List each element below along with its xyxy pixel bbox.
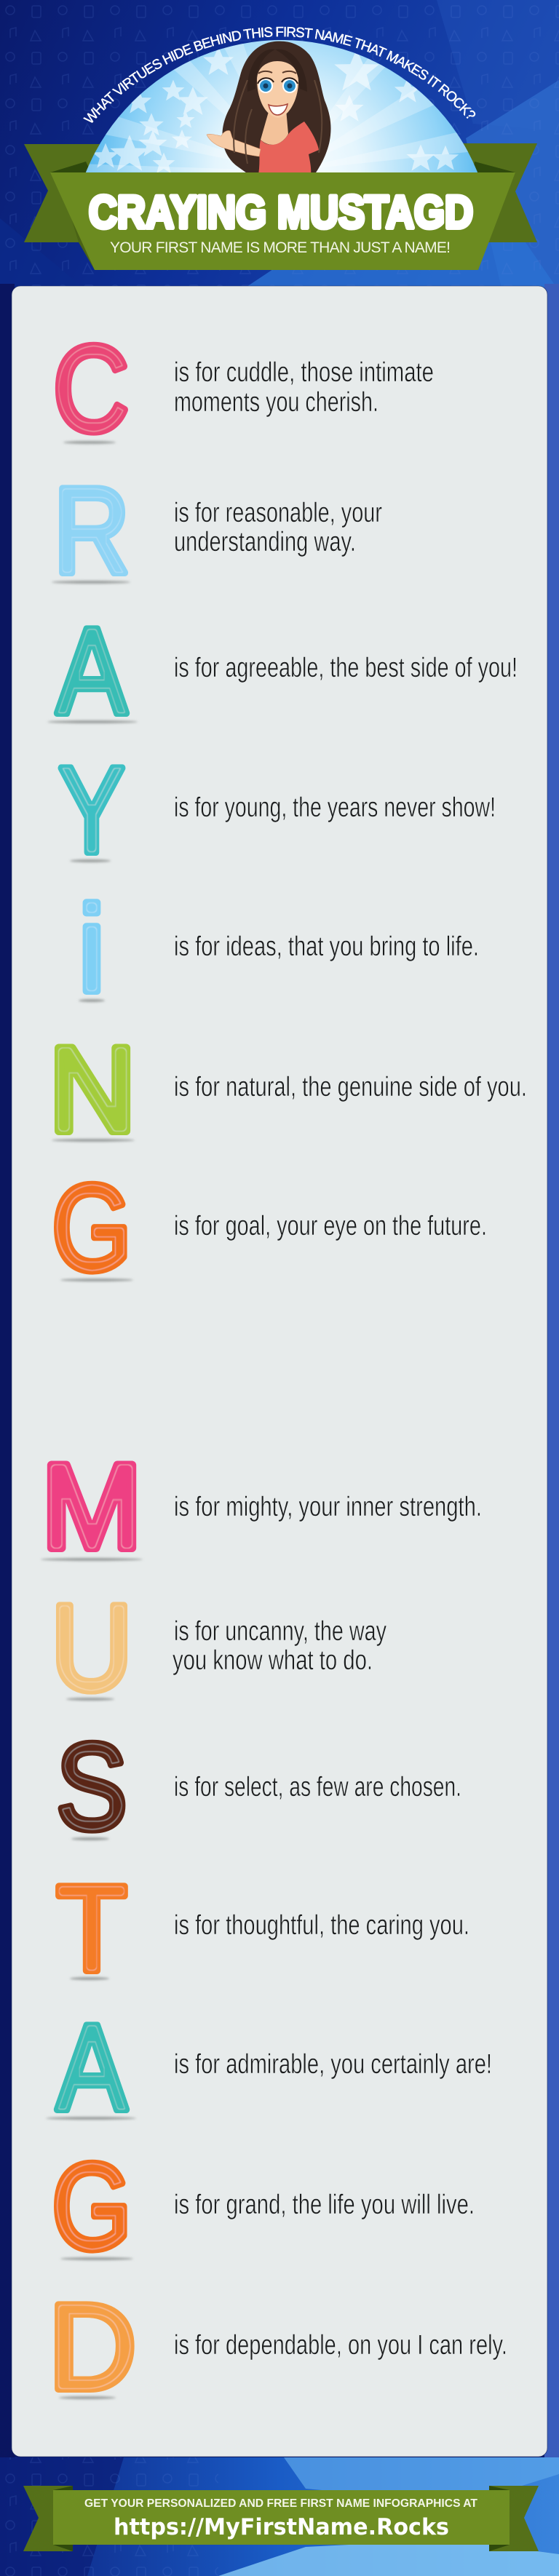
row: G: is for grand, the life you will live. bbox=[174, 2190, 475, 2220]
row: S: S bbox=[56, 1718, 127, 1855]
row: S bbox=[56, 1718, 461, 1855]
neck and chest bbox=[261, 113, 288, 145]
hair highlights bbox=[234, 80, 322, 164]
row: U bbox=[51, 1580, 386, 1716]
row: D bbox=[48, 2278, 507, 2415]
row: I: i bbox=[78, 880, 106, 1017]
footer url: https://MyFirstName.Rocks bbox=[114, 2514, 449, 2540]
header background bbox=[0, 0, 559, 291]
row: T bbox=[56, 1860, 469, 1997]
row: C bbox=[53, 321, 434, 457]
footer ribbon bbox=[23, 2486, 539, 2551]
title: CRAYING MUSTAGD bbox=[89, 187, 473, 238]
shirt bbox=[258, 122, 319, 175]
eyes bbox=[258, 79, 273, 93]
arched tagline: WHAT VIRTUES HIDE BEHIND THIS FIRST NAME THAT MAKES IT ROCK? bbox=[83, 26, 476, 123]
row: U: you know what to do. bbox=[173, 1645, 373, 1676]
sunburst circle with stars bbox=[86, 40, 477, 172]
row: G: G bbox=[52, 1159, 132, 1296]
row: Y bbox=[59, 742, 496, 878]
row: R: is for reasonable, your bbox=[174, 498, 382, 528]
row: G: G bbox=[52, 2138, 132, 2275]
fringe bbox=[247, 49, 307, 92]
row: G bbox=[52, 1159, 487, 1296]
row: R: understanding way. bbox=[174, 527, 356, 557]
row: A: A bbox=[57, 2000, 127, 2136]
row: Y: Y bbox=[59, 742, 124, 878]
row: A bbox=[46, 2000, 492, 2136]
hair back bbox=[222, 41, 331, 175]
footer call to action: GET YOUR PERSONALIZED AND FREE FIRST NAME INFOGRAPHICS AT bbox=[84, 2497, 477, 2510]
row: T: T bbox=[56, 1860, 127, 1997]
header ribbon back bbox=[24, 143, 537, 270]
row: C: C bbox=[53, 321, 129, 457]
row: G bbox=[52, 2138, 475, 2275]
header ribbon front bbox=[50, 172, 515, 270]
face bbox=[257, 61, 298, 118]
row: D: D bbox=[48, 2278, 137, 2415]
row: S: is for select, as few are chosen. bbox=[174, 1772, 461, 1802]
row: C: is for cuddle, those intimate bbox=[174, 357, 434, 388]
illustration: woman bbox=[207, 41, 331, 175]
row: R: R bbox=[54, 463, 130, 599]
row: R bbox=[52, 463, 382, 599]
row: M bbox=[41, 1439, 482, 1573]
row: N bbox=[49, 1022, 527, 1156]
footer background bbox=[0, 2457, 559, 2576]
arm and hand bbox=[207, 130, 261, 156]
mouth bbox=[269, 104, 288, 115]
row: N: N bbox=[49, 1022, 136, 1156]
row: I bbox=[78, 880, 479, 1017]
row: C: moments you cherish. bbox=[174, 387, 378, 418]
subtitle: YOUR FIRST NAME IS MORE THAN JUST A NAME! bbox=[110, 239, 451, 256]
row: U: U bbox=[51, 1580, 132, 1716]
row: T: is for thoughtful, the caring you. bbox=[174, 1910, 469, 1941]
row: M: M bbox=[41, 1439, 142, 1573]
row: A: A bbox=[57, 603, 127, 739]
row: U: is for uncanny, the way bbox=[174, 1616, 386, 1647]
row: A bbox=[47, 603, 518, 739]
